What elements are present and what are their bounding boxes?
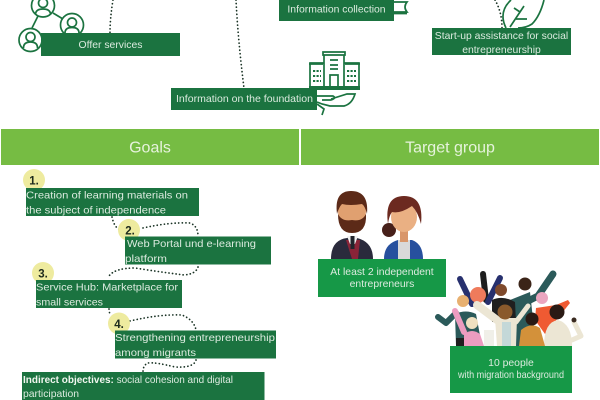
- step 2: web portal: platform: [125, 254, 167, 265]
- step 2: web portal: [118, 219, 271, 265]
- illustration: two entrepreneurs: [331, 191, 423, 259]
- callout: indirect objectives: participation: [23, 389, 79, 400]
- step 1: learning materials: [23, 169, 199, 216]
- step 3: service hub: small services: [36, 298, 103, 308]
- label: Information on the foundation: Information on the foundation: [176, 94, 313, 105]
- label: Offer services: Offer services: [79, 40, 142, 51]
- callout: indirect objectives: [22, 372, 264, 400]
- heading: Goals: [1, 129, 299, 165]
- step 4: strengthening entrepreneurship: Strengthening entrepreneurship: [115, 333, 275, 344]
- step 4: strengthening entrepreneurship: [108, 312, 276, 359]
- step 3: service hub: [32, 262, 182, 308]
- step 4: strengthening entrepreneurship: 4.: [114, 319, 124, 331]
- callout: indirect objectives: Indirect objectives: social cohesion and digital: [23, 375, 233, 386]
- connector: top dotted lines: [110, 0, 502, 88]
- label: 10 people with migration background: [450, 346, 572, 393]
- step 3: service hub: Service Hub: Marketplace for: [36, 282, 179, 294]
- label: at least 2 independent entrepreneurs: At least 2 independent: [330, 267, 434, 278]
- step 2: web portal: 2.: [125, 226, 135, 238]
- label: Information collection: Information collection: [287, 4, 386, 16]
- icon: book: [394, 2, 407, 14]
- label: Start-up assistance: entrepreneurship: [462, 45, 541, 56]
- label: Start-up assistance: [432, 28, 571, 56]
- step 1: learning materials: 1.: [29, 176, 39, 188]
- icon: buildings on a hand: [309, 52, 360, 115]
- label: at least 2 independent entrepreneurs: [318, 259, 446, 297]
- heading: Target group: [301, 129, 599, 165]
- label: at least 2 independent entrepreneurs: entrepreneurs: [350, 279, 414, 290]
- label: Information collection: [279, 0, 394, 21]
- heading: Goals: Goals: [129, 140, 171, 156]
- label: Start-up assistance: Start-up assistance for social: [435, 31, 568, 42]
- icon: leaf: [503, 0, 544, 28]
- label: Offer services: [41, 33, 180, 56]
- step 2: web portal: Web Portal und e-learning: [127, 239, 256, 250]
- connector: goal dotted lines: [109, 217, 198, 372]
- illustration: crowd of people: [438, 274, 581, 346]
- label: 10 people with migration background: 10 people: [488, 358, 534, 369]
- step 1: learning materials: Creation of learning materials on: [26, 190, 188, 202]
- step 3: service hub: 3.: [38, 268, 48, 280]
- step 1: learning materials: the subject of independence: [26, 206, 166, 216]
- label: 10 people with migration background: with migration background: [457, 370, 564, 381]
- step 4: strengthening entrepreneurship: among migrants: [115, 348, 196, 359]
- heading: Target group: Target group: [405, 140, 495, 156]
- icon: connected people network: [19, 0, 84, 52]
- label: Information on the foundation: [171, 88, 317, 110]
